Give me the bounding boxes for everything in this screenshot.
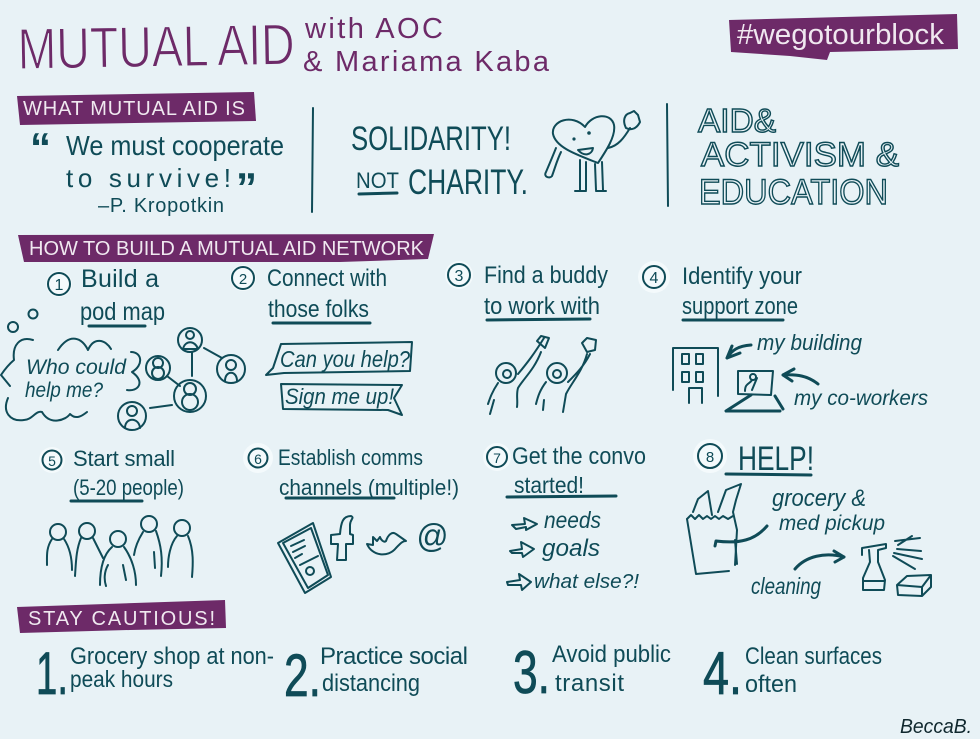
caution 3: transit — [555, 670, 624, 697]
quote: ” — [236, 164, 257, 211]
step 7: get the convo started: Get the convo — [512, 443, 646, 470]
arrow to laptop — [783, 369, 818, 384]
solidarity text: SOLIDARITY! — [351, 120, 511, 158]
step 6: establish comms channels: channels (multiple!) — [279, 475, 459, 500]
step 3: find a buddy: Find a buddy — [484, 262, 608, 289]
title: with AOC — [304, 13, 443, 45]
title: & Mariama Kaba — [303, 46, 550, 78]
step 3: find a buddy: 3 — [455, 268, 464, 285]
arrow list — [507, 507, 639, 593]
arrow to bag — [715, 526, 767, 546]
heading: what mutual aid is: WHAT MUTUAL AID IS — [23, 98, 245, 120]
icon: laptop — [726, 371, 783, 411]
divider — [667, 104, 668, 206]
hashtag banner: #wegotourblock — [737, 19, 944, 51]
icon: at sign: @ — [416, 517, 448, 554]
title — [17, 12, 550, 82]
step 5: start small: (5-20 people) — [73, 475, 184, 500]
step 2: connect with those folks: 2 — [239, 271, 247, 288]
quote: to survive! — [66, 163, 231, 193]
step 5: start small — [39, 446, 193, 586]
caution 3: 3. — [513, 639, 550, 706]
step 7: get the convo started: 7 — [493, 450, 501, 466]
step 4: identify your support zone: Identify your — [682, 263, 802, 290]
step 4: identify your support zone: support zone — [682, 293, 798, 320]
label: grocery and med pickup — [772, 485, 885, 535]
outlined words: EDUCATION — [699, 173, 888, 212]
icon: grocery bag — [687, 484, 741, 574]
step 8: help: 8 — [706, 449, 714, 466]
caution 2: distancing — [322, 670, 420, 697]
label: grocery and med pickup: med pickup — [779, 512, 885, 535]
arrow list: what else?! — [534, 571, 639, 593]
speech bubbles: Can you help? — [280, 346, 410, 372]
outlined words — [698, 102, 899, 212]
icon: twitter bird — [367, 533, 406, 554]
solidarity text — [351, 120, 528, 202]
solidarity text: NOT — [356, 168, 399, 193]
caution 4 — [703, 640, 882, 707]
step 6: establish comms channels: 6 — [254, 451, 262, 467]
arrow to spray — [795, 551, 844, 569]
step 8: help — [687, 439, 931, 599]
heading: stay cautious — [17, 600, 226, 633]
step 1: build a pod map: 1 — [55, 277, 64, 294]
quote: We must cooperate — [66, 130, 284, 161]
outlined words: AID& — [698, 102, 776, 139]
step 1: build a pod map: Build a — [81, 265, 159, 293]
speech bubbles — [266, 342, 412, 415]
icon: sponge — [897, 575, 931, 596]
caution 1: peak hours — [70, 666, 173, 692]
cloud: who could help me — [1, 310, 140, 421]
arrow to building — [727, 345, 751, 358]
step 1: build a pod map: pod map — [80, 298, 165, 326]
icon: raised fists — [488, 336, 596, 414]
hashtag banner — [729, 14, 958, 60]
title: MUTUAL AID — [17, 12, 295, 82]
icon: group of people — [47, 516, 193, 586]
icon: facebook — [331, 516, 353, 560]
arrow list: goals — [542, 535, 600, 562]
step 1: build a pod map — [1, 265, 245, 430]
heading: stay cautious: STAY CAUTIOUS! — [28, 608, 215, 630]
step 2: connect with those folks: those folks — [268, 296, 369, 323]
caution 3: Avoid public — [552, 641, 671, 668]
step 7: get the convo started — [483, 443, 646, 593]
outlined words: ACTIVISM & — [701, 136, 899, 174]
step 6: establish comms channels — [243, 443, 459, 593]
divider — [312, 108, 313, 212]
speech bubbles: Sign me up! — [285, 384, 394, 409]
caution 1 — [36, 640, 274, 707]
caution 2 — [284, 642, 468, 709]
caution 1: Grocery shop at non- — [70, 643, 274, 670]
icon: spray bottle — [862, 536, 922, 590]
step 5: start small: 5 — [48, 453, 56, 469]
quote: –P. Kropotkin — [98, 195, 224, 217]
caution 2: Practice social — [320, 643, 468, 670]
step 6: establish comms channels: Establish comms — [278, 445, 423, 470]
label: my co-workers: my co-workers — [794, 387, 928, 410]
caution 1: 1. — [36, 640, 68, 707]
cloud: who could help me: Who could — [26, 356, 127, 379]
label: grocery and med pickup: grocery & — [772, 485, 866, 512]
step 7: get the convo started: started! — [514, 472, 584, 498]
quote — [30, 124, 284, 217]
step 4: identify your support zone — [638, 261, 928, 411]
caution 3 — [513, 639, 671, 706]
caution 4: Clean surfaces — [745, 643, 882, 670]
caution 4: often — [745, 671, 797, 698]
step 2: connect with those folks — [230, 265, 412, 415]
icon: building — [673, 348, 718, 403]
solidarity text: CHARITY. — [408, 163, 528, 202]
label: my building: my building — [757, 330, 863, 355]
icon: waving heart — [545, 111, 640, 191]
arrow list: needs — [544, 507, 601, 533]
heading: what mutual aid is — [17, 92, 256, 125]
step 5: start small: Start small — [73, 446, 175, 471]
quote: “ — [30, 124, 51, 171]
pod map network — [118, 328, 245, 430]
step 3: find a buddy — [445, 261, 608, 414]
icon: phone — [278, 523, 331, 593]
step 8: help: HELP! — [738, 440, 814, 478]
cloud: who could help me: help me? — [25, 379, 103, 402]
caution 2: 2. — [284, 642, 321, 709]
step 3: find a buddy: to work with — [484, 293, 600, 320]
step 2: connect with those folks: Connect with — [267, 265, 387, 292]
label: cleaning: cleaning — [751, 573, 821, 599]
heading: how to build: HOW TO BUILD A MUTUAL AID NETWORK — [29, 238, 425, 260]
signature: BeccaB. — [900, 716, 972, 738]
caution 4: 4. — [703, 640, 742, 707]
step 4: identify your support zone: 4 — [650, 270, 659, 287]
